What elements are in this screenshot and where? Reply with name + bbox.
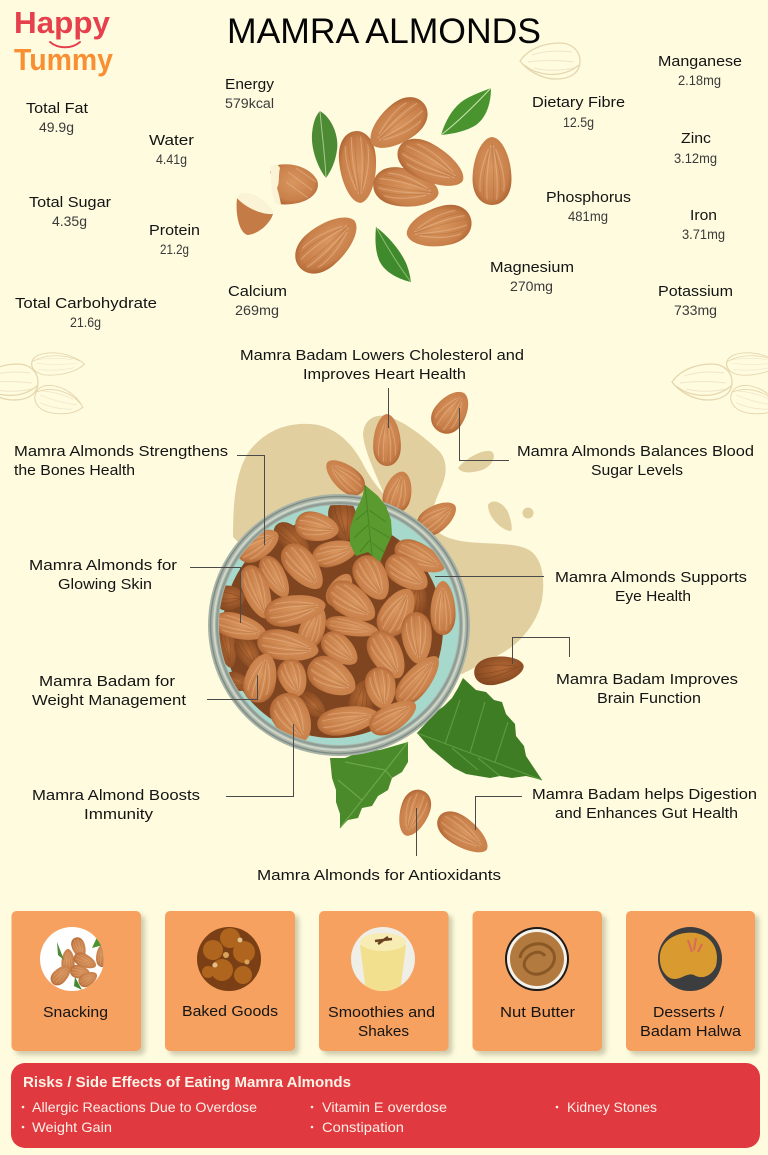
leaf: right (441, 88, 491, 135)
nutrient: Total Carbohydrate (15, 295, 157, 330)
nutrient: Water: Water (149, 132, 194, 149)
card: Snacking: Snacking (43, 1004, 108, 1021)
nutrient: Water: 4.41g (156, 152, 187, 167)
risks heading: Risks / Side Effects of Eating Mamra Almonds (23, 1074, 351, 1091)
nutrient: Phosphorus (546, 189, 631, 224)
nutrient: Dietary Fibre (532, 94, 625, 130)
leaf: bottom (375, 227, 411, 282)
benefit: blood sugar: Mamra Almonds Balances Blood (517, 443, 754, 460)
benefit: skin: Glowing Skin (58, 576, 152, 593)
nutrient: Potassium: Potassium (658, 283, 733, 300)
benefit: heart health: Mamra Badam Lowers Cholesterol and (240, 347, 524, 364)
nutrient: Total Carbohydrate: Total Carbohydrate (15, 295, 157, 312)
nutrient: Zinc: Zinc (681, 130, 712, 147)
nutrient: Total Fat: 49.9g (39, 120, 74, 135)
benefit: weight (32, 673, 187, 709)
tan blob background (233, 416, 543, 674)
risks list: Kidney Stones (567, 1099, 657, 1115)
connector lines (190, 388, 570, 856)
panel: risks and side effects (11, 1063, 760, 1148)
big leaf: right (417, 678, 542, 780)
benefit: digestion: and Enhances Gut Health (555, 805, 738, 822)
benefit: immunity: Mamra Almond Boosts (32, 787, 200, 804)
almonds behind bowl (319, 453, 463, 541)
broken almond: upper (270, 164, 318, 205)
benefit: eye health: Eye Health (615, 588, 691, 605)
nutrient: Total Sugar: Total Sugar (29, 194, 111, 211)
nutrient: Phosphorus: 481mg (568, 209, 608, 224)
nutrient: Calcium (228, 283, 287, 318)
nutrient: Magnesium: Magnesium (490, 259, 574, 276)
card: Desserts / Badam Halwa: Badam Halwa (640, 1023, 742, 1040)
risks list: Weight Gain (32, 1119, 112, 1135)
benefit: blood sugar: Sugar Levels (591, 462, 683, 479)
benefit: brain: Mamra Badam Improves (556, 671, 738, 688)
card: Nut Butter: Nut Butter (500, 1004, 575, 1021)
big leaf: bottom (330, 742, 408, 828)
nutrient: Zinc: 3.12mg (674, 151, 717, 166)
benefit: digestion (532, 786, 757, 822)
benefit: eye health (555, 569, 747, 605)
card: Snacking (12, 911, 141, 1051)
card: Baked Goods (165, 911, 295, 1051)
leaf: left (312, 111, 337, 178)
card: Desserts / Badam Halwa: Desserts / (653, 1004, 725, 1021)
nutrient: Dietary Fibre: 12.5g (563, 115, 594, 130)
nutrient: Total Sugar (29, 194, 111, 229)
leaf on bowl (350, 485, 392, 562)
card: Smoothies and Shakes: Smoothies and (328, 1004, 435, 1021)
benefit: eye health: Mamra Almonds Supports (555, 569, 747, 586)
benefit: immunity: Immunity (84, 806, 154, 823)
broken almond: lower (237, 193, 273, 235)
benefit: heart health (240, 347, 524, 383)
falling almonds (373, 384, 526, 862)
card: Smoothies and Shakes: Shakes (358, 1023, 409, 1040)
nutrient: Potassium: 733mg (674, 303, 717, 318)
whole almonds (337, 130, 379, 204)
nutrient: Iron: 3.71mg (682, 227, 725, 242)
card: Desserts / Badam Halwa (626, 911, 755, 1051)
logo: Happy Tummy: Happy (14, 5, 111, 40)
nutrient: Calcium: 269mg (235, 303, 279, 318)
risks list: Vitamin E overdose (322, 1099, 447, 1115)
nutrient: Dietary Fibre: Dietary Fibre (532, 94, 625, 111)
nutrient: Calcium: Calcium (228, 283, 287, 300)
almond cluster illustration (237, 88, 511, 283)
decorative almonds: right (672, 353, 768, 420)
nutrient: Total Fat: Total Fat (26, 100, 89, 117)
risks list (22, 1099, 657, 1135)
nutrient: Iron (682, 207, 725, 242)
nutrient: Potassium (658, 283, 733, 318)
nutrient: Manganese (658, 53, 742, 88)
nutrient: Total Fat (26, 100, 89, 135)
benefit: weight: Mamra Badam for (39, 673, 175, 690)
nutrient: Total Carbohydrate: 21.6g (70, 315, 101, 330)
nutrient: Manganese: 2.18mg (678, 73, 721, 88)
nutrient: Phosphorus: Phosphorus (546, 189, 631, 206)
decorative almonds: left (0, 353, 86, 420)
benefit: heart health: Improves Heart Health (303, 366, 466, 383)
benefit: brain: Brain Function (597, 690, 701, 707)
nutrient: Manganese: Manganese (658, 53, 742, 70)
benefit: weight: Weight Management (32, 692, 187, 709)
nutrient: Total Sugar: 4.35g (52, 214, 87, 229)
glass bowl (208, 485, 470, 756)
title: MAMRA ALMONDS (227, 12, 541, 51)
benefit: bones: the Bones Health (14, 462, 135, 479)
benefit: antioxidants: Mamra Almonds for Antioxidants (257, 867, 501, 884)
decorative almond outline: top (520, 43, 580, 79)
benefit: bones (14, 443, 228, 479)
benefit: skin: Mamra Almonds for (29, 557, 177, 574)
nutrient: Energy (225, 76, 275, 111)
nutrient: Energy: 579kcal (225, 96, 274, 111)
almonds in bowl (211, 497, 456, 750)
benefit: digestion: Mamra Badam helps Digestion (532, 786, 757, 803)
benefit: immunity (32, 787, 200, 823)
benefit: brain (556, 671, 738, 707)
card: Baked Goods: Baked Goods (182, 1003, 278, 1020)
logo: Happy Tummy (14, 5, 114, 77)
nutrient: Energy: Energy (225, 76, 275, 93)
nutrient: Magnesium (490, 259, 574, 294)
logo: Happy Tummy: Tummy (14, 42, 114, 77)
card: Smoothies and Shakes (319, 911, 448, 1051)
risks list: Constipation (322, 1119, 404, 1135)
nutrient: Protein: 21.2g (160, 242, 189, 257)
nutrient: Iron: Iron (690, 207, 717, 224)
nutrient: Water (149, 132, 194, 167)
nutrient: Zinc (674, 130, 717, 166)
card: Nut Butter (472, 911, 602, 1051)
nutrient: Magnesium: 270mg (510, 279, 553, 294)
benefit: skin (29, 557, 177, 593)
nutrient: Protein (149, 222, 200, 257)
benefit: blood sugar (517, 443, 754, 479)
nutrient: Protein: Protein (149, 222, 200, 239)
benefit: bones: Mamra Almonds Strengthens (14, 443, 228, 460)
risks list: Allergic Reactions Due to Overdose (32, 1099, 257, 1115)
